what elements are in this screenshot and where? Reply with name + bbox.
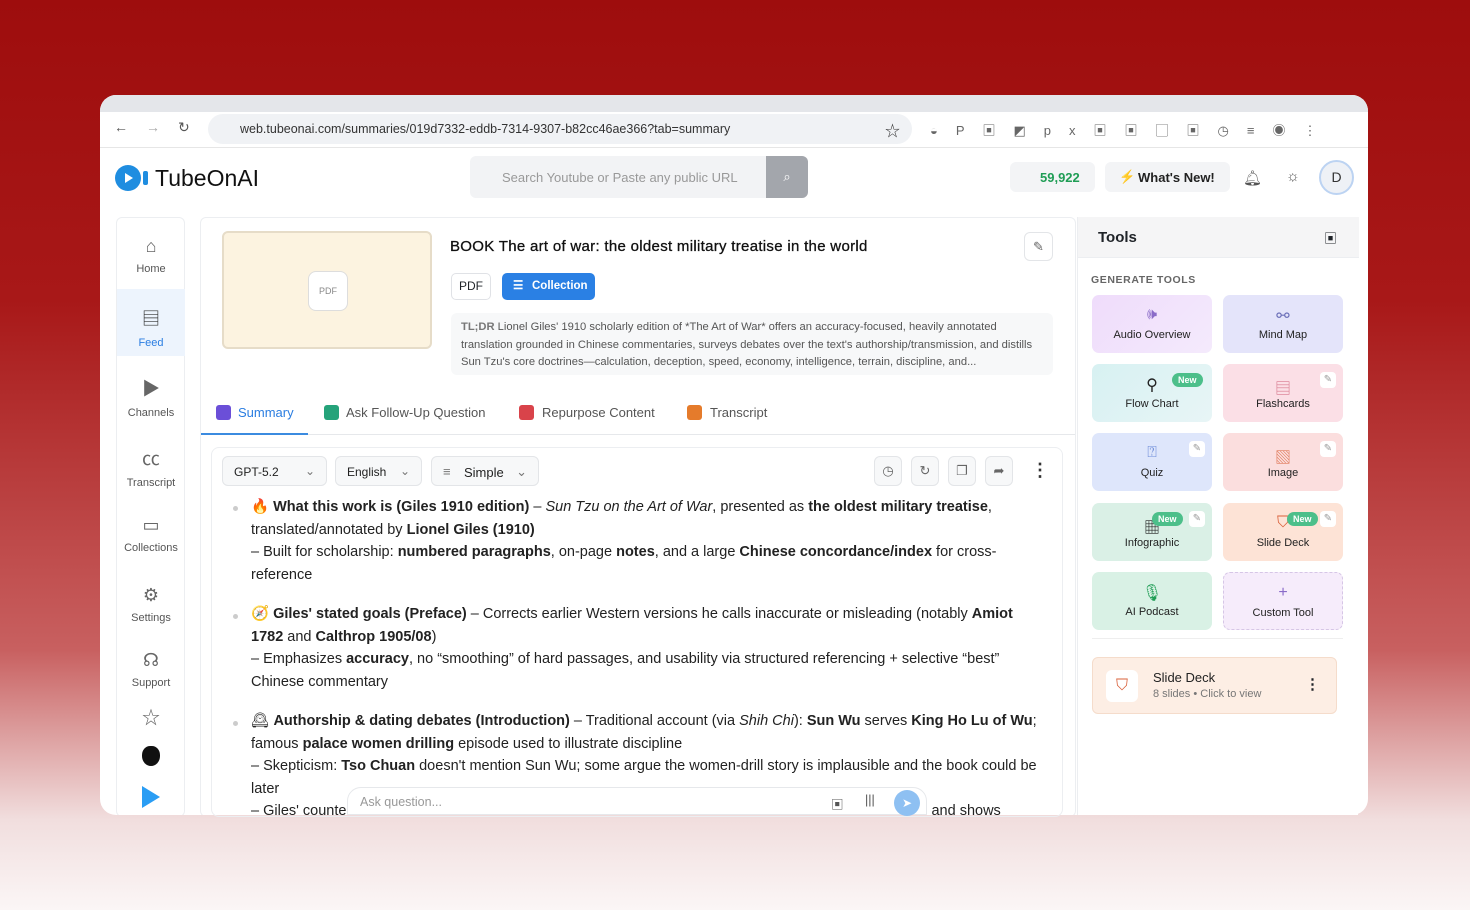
ask question bar: Ask question... (360, 795, 442, 809)
tools panel: ▤ (1275, 381, 1291, 398)
tools panel: ✎ (1324, 374, 1332, 385)
header: ▣ (1324, 231, 1337, 246)
tools panel: Image (1268, 467, 1298, 479)
left sidebar: ☊ (143, 650, 159, 670)
tools panel (1077, 217, 1358, 815)
left sidebar: Settings (131, 612, 171, 624)
icon: apple (142, 746, 160, 766)
thumbnail: PDF (319, 286, 337, 296)
summary bullets (233, 506, 238, 511)
tools panel: ⛉ (1277, 514, 1289, 531)
ask question bar: ||| (865, 793, 875, 807)
tools panel: Quiz (1141, 467, 1163, 479)
address bar row: ← (114, 119, 128, 135)
tools panel: ⍰ (1147, 444, 1157, 461)
tab strip (100, 95, 1368, 112)
search (470, 156, 808, 198)
app header (115, 156, 1354, 198)
text: ◷ (882, 463, 894, 478)
tools panel: Flashcards (1256, 398, 1310, 410)
tabs: Ask Follow-Up Question (346, 405, 485, 420)
text: ✎ (1033, 239, 1044, 254)
left sidebar: Transcript (127, 477, 175, 489)
slide deck card: Slide Deck (1153, 670, 1215, 685)
tabs: Transcript (710, 405, 767, 420)
thumbnail (222, 231, 432, 349)
left sidebar: Feed (138, 337, 164, 349)
tools panel: Infographic (1125, 537, 1179, 549)
tools panel: Slide Deck (1257, 537, 1309, 549)
tabs: Repurpose Content (542, 405, 655, 420)
search: Search Youtube or Paste any public URL (502, 170, 738, 185)
tools panel: 🎙︎ (1142, 585, 1162, 602)
ask question bar: ➤ (902, 796, 912, 810)
tabs: Summary (238, 405, 294, 420)
tools panel: ⚯ (1276, 308, 1290, 325)
collection button: Collection (532, 280, 588, 292)
credits (1010, 162, 1095, 192)
tools panel: ▦ (1144, 520, 1160, 537)
text: English (347, 465, 386, 479)
toolbar: ⌄ (305, 464, 315, 478)
text: 🧭 Giles' stated goals (Preface) – Corrects earlier Western versions he calls inaccurate or misleading (notably Amiot 1782 and Calthrop 1905/08) (251, 606, 1013, 644)
text: 🔥 What this work is (Giles 1910 edition) – Sun Tzu on the Art of War, presented as the oldest military treatise, translated/annotated by Lionel Giles (1910) (251, 499, 992, 538)
text: 🕰 Authorship & dating debates (Introduction) – Traditional account (via Shih Chi): Sun Wu serves King Ho Lu of Wu; famous palace women drilling episode used to illustrate discipline (251, 713, 1037, 752)
left sidebar: Home (136, 263, 166, 275)
header (1078, 217, 1359, 258)
logo: TubeOnAI (155, 164, 259, 190)
address bar row: → (146, 119, 160, 135)
tools panel: ✎ (1193, 513, 1201, 524)
tools panel: Flow Chart (1125, 398, 1179, 410)
left sidebar: ▶︎ (142, 379, 160, 399)
app header: 🔔︎ (1243, 170, 1262, 187)
tools panel: New (1158, 514, 1177, 524)
text: – Built for scholarship: numbered paragraphs, on-page notes, and a large Chinese concordance/index for cross-reference (251, 544, 996, 582)
text: Simple (464, 465, 504, 480)
title: BOOK The art of war: the oldest military treatise in the world (450, 238, 868, 255)
left sidebar: ▭ (142, 515, 160, 535)
PDF button: PDF (459, 279, 483, 293)
tools panel: ▧ (1275, 450, 1291, 467)
text: – Emphasizes accuracy, no “smoothing” of hard passages, and usability via structured referencing + selective “best” Chinese commentary (251, 651, 999, 690)
tools panel: + (1278, 584, 1288, 601)
tools panel: 🕪︎ (1147, 306, 1157, 323)
toolbar: GPT-5.2 (234, 465, 279, 479)
tools panel: ✎ (1193, 443, 1201, 454)
whats new: ⚡ (1119, 169, 1135, 184)
left sidebar (116, 217, 185, 817)
tabs (201, 400, 1075, 435)
collection button: ☰ (513, 280, 523, 292)
main panel (200, 217, 1076, 817)
text: ↻ (920, 463, 930, 478)
tools panel: Mind Map (1259, 329, 1307, 341)
address bar row: ↻ (178, 119, 190, 135)
ask question bar (347, 787, 927, 815)
text: ⌄ (400, 464, 410, 478)
text: – Skepticism: Tso Chuan doesn't mention Sun Wu; some argue the women-drill story is implausible and the book could be later (251, 758, 1037, 796)
app header: ☼ (1286, 168, 1300, 185)
left sidebar: Collections (124, 542, 178, 554)
url pill (208, 114, 912, 144)
tools panel: AI Podcast (1125, 606, 1179, 618)
left sidebar: ⚙︎ (143, 585, 159, 605)
slide deck card: ⛉ (1116, 677, 1128, 694)
browser window (100, 95, 1368, 815)
slide deck card: ⋮ (1305, 676, 1320, 693)
tools panel: Custom Tool (1253, 607, 1313, 619)
left sidebar: Channels (128, 407, 174, 419)
toolbar (222, 456, 327, 486)
text: ⋮ (1031, 460, 1049, 480)
left sidebar: ▤ (142, 309, 160, 329)
left sidebar: Support (132, 677, 170, 689)
tools panel: New (1178, 375, 1197, 385)
slide deck card: 8 slides • Click to view (1153, 688, 1261, 700)
left sidebar: ☆ (142, 708, 160, 728)
tools panel: ✎ (1324, 443, 1332, 454)
tldr: TL;DR Lionel Giles' 1910 scholarly edition of *The Art of War* offers an accuracy-focused, heavily annotated translation grounded in Chinese commentaries, surveys debates over the text's authorship/transmission, and distills Sun Tzu's core doctrines—calculation, deception, speed, economy, intelligence, terrain, discipline, and... (461, 321, 1032, 368)
tools panel: GENERATE TOOLS (1091, 274, 1196, 286)
ask question bar: ▣ (831, 798, 844, 812)
whats new: What's New! (1138, 170, 1215, 185)
collection button (502, 273, 595, 300)
slide deck card (1092, 657, 1337, 714)
search: ⌕ (783, 169, 791, 184)
avatar: D (1331, 169, 1342, 185)
left sidebar: ㏄ (142, 449, 160, 469)
whats new (1105, 162, 1230, 192)
extension icons: ◒P▣◩px▣▣▢▣◷≡◉⋮ (930, 123, 1334, 138)
text: ➦ (994, 463, 1004, 478)
tools panel: New (1293, 514, 1312, 524)
content card (211, 447, 1063, 817)
avatar (1319, 160, 1354, 195)
tools panel: ⚲ (1146, 377, 1158, 394)
text: ⌄ (516, 464, 527, 479)
url pill: web.tubeonai.com/summaries/019d7332-eddb-7314-9307-b82cc46ae366?tab=summary (240, 122, 730, 136)
address bar row (100, 112, 1368, 148)
url pill: ☆ (885, 123, 900, 140)
tools panel: Audio Overview (1113, 329, 1191, 341)
PDF button (451, 273, 491, 300)
text: ≡ (443, 464, 451, 479)
tools panel: ✎ (1324, 513, 1332, 524)
text: ❐ (956, 463, 968, 478)
credits: 59,922 (1040, 170, 1080, 185)
left sidebar: ⌂ (146, 236, 156, 256)
header: Tools (1098, 229, 1137, 246)
